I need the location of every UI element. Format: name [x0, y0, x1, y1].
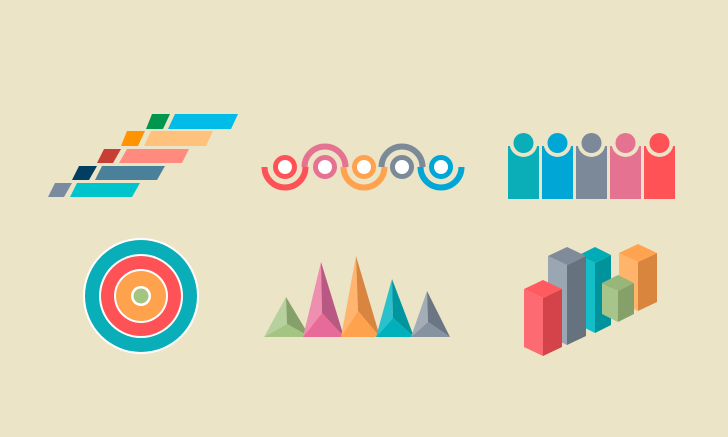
- panel: people columns: [508, 129, 675, 199]
- panel: target: [83, 238, 199, 354]
- panel: wave timeline: [264, 146, 462, 188]
- panel: stepped stripes: [48, 114, 238, 197]
- panel: pyramids: [264, 256, 450, 337]
- panel: 3D bar chart: [524, 244, 657, 356]
